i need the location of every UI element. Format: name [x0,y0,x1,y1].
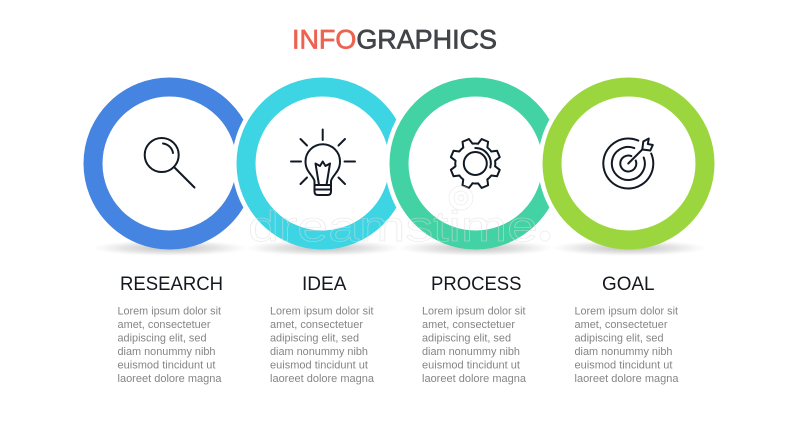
text: idea: diam nonummy nibh [270,346,368,358]
ring gap: idea [232,73,413,254]
ring gap: goal [538,73,719,254]
heading: research: RESEARCH [120,274,223,295]
icon: magnifying glass [145,138,194,188]
text: research: diam nonummy nibh [118,346,216,358]
text: goal: diam nonummy nibh [574,346,672,358]
text: idea: adipiscing elit, sed [270,332,359,344]
text: goal: euismod tincidunt ut [574,360,672,372]
text: goal: amet, consectetuer [574,319,668,331]
ring: research [93,87,246,240]
text: idea: euismod tincidunt ut [270,360,368,372]
text: research: Lorem ipsum dolor sit [118,306,221,318]
text: idea: amet, consectetuer [270,319,363,331]
panel: idea [232,73,413,385]
text: idea [270,306,375,385]
text: goal: adipiscing elit, sed [574,332,664,344]
icon: gear [448,137,502,190]
text: goal: Lorem ipsum dolor sit [574,306,678,318]
text: process [422,306,527,385]
text: goal: laoreet dolore magna [574,373,679,385]
text: process: euismod tincidunt ut [422,360,520,372]
text: idea: Lorem ipsum dolor sit [270,306,374,318]
panel: process [385,73,566,385]
text: process: laoreet dolore magna [422,373,527,385]
text: research: euismod tincidunt ut [118,360,216,372]
panel: goal [538,73,719,385]
shadow: goal [551,240,707,256]
text: process: adipiscing elit, sed [422,332,511,344]
shadow: research [92,240,248,256]
title: INFOGRAPHICS [292,24,497,54]
text: research: amet, consectetuer [118,319,211,331]
text: process: diam nonummy nibh [422,346,520,358]
text: process: Lorem ipsum dolor sit [422,306,526,318]
ring gap: process [385,73,566,254]
text: goal [574,306,679,385]
text: research: adipiscing elit, sed [118,332,206,344]
shadow: idea [245,240,401,256]
shadow: process [398,240,554,256]
heading: goal: GOAL [602,274,654,295]
icon: light bulb [291,130,355,195]
text: process: amet, consectetuer [422,319,515,331]
ring: process [399,87,552,240]
text: research: laoreet dolore magna [118,373,222,385]
ring: goal [552,87,705,240]
text: idea: laoreet dolore magna [270,373,375,385]
icon: target [603,138,653,189]
text: research [118,306,222,385]
heading: idea: IDEA [302,274,347,295]
ring: idea [246,87,399,240]
panel: research [92,87,248,385]
heading: process: PROCESS [431,274,522,295]
watermark [248,186,550,251]
watermark: dreamstime [248,203,538,251]
